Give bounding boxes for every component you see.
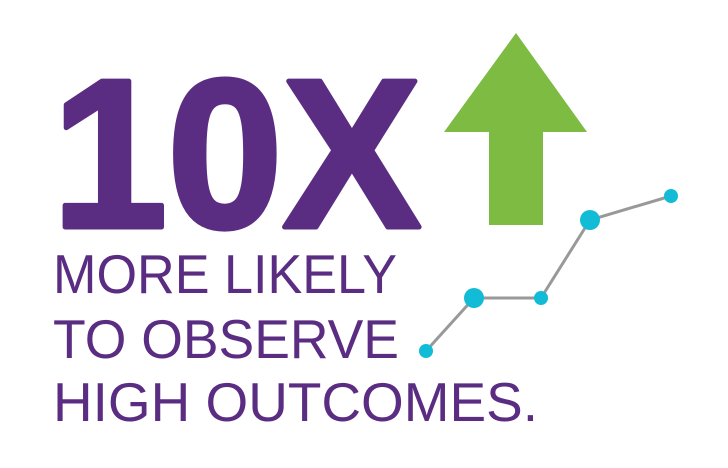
- line 1: MORE LIKELY: [53, 243, 397, 305]
- line 3: HIGH OUTCOMES.: [53, 371, 538, 433]
- line 2: TO OBSERVE: [53, 308, 399, 370]
- text block: subtitle: [53, 243, 538, 433]
- icon: green up arrow: [444, 33, 587, 225]
- line chart: [419, 189, 678, 358]
- headline: 10X: 10X: [52, 35, 421, 272]
